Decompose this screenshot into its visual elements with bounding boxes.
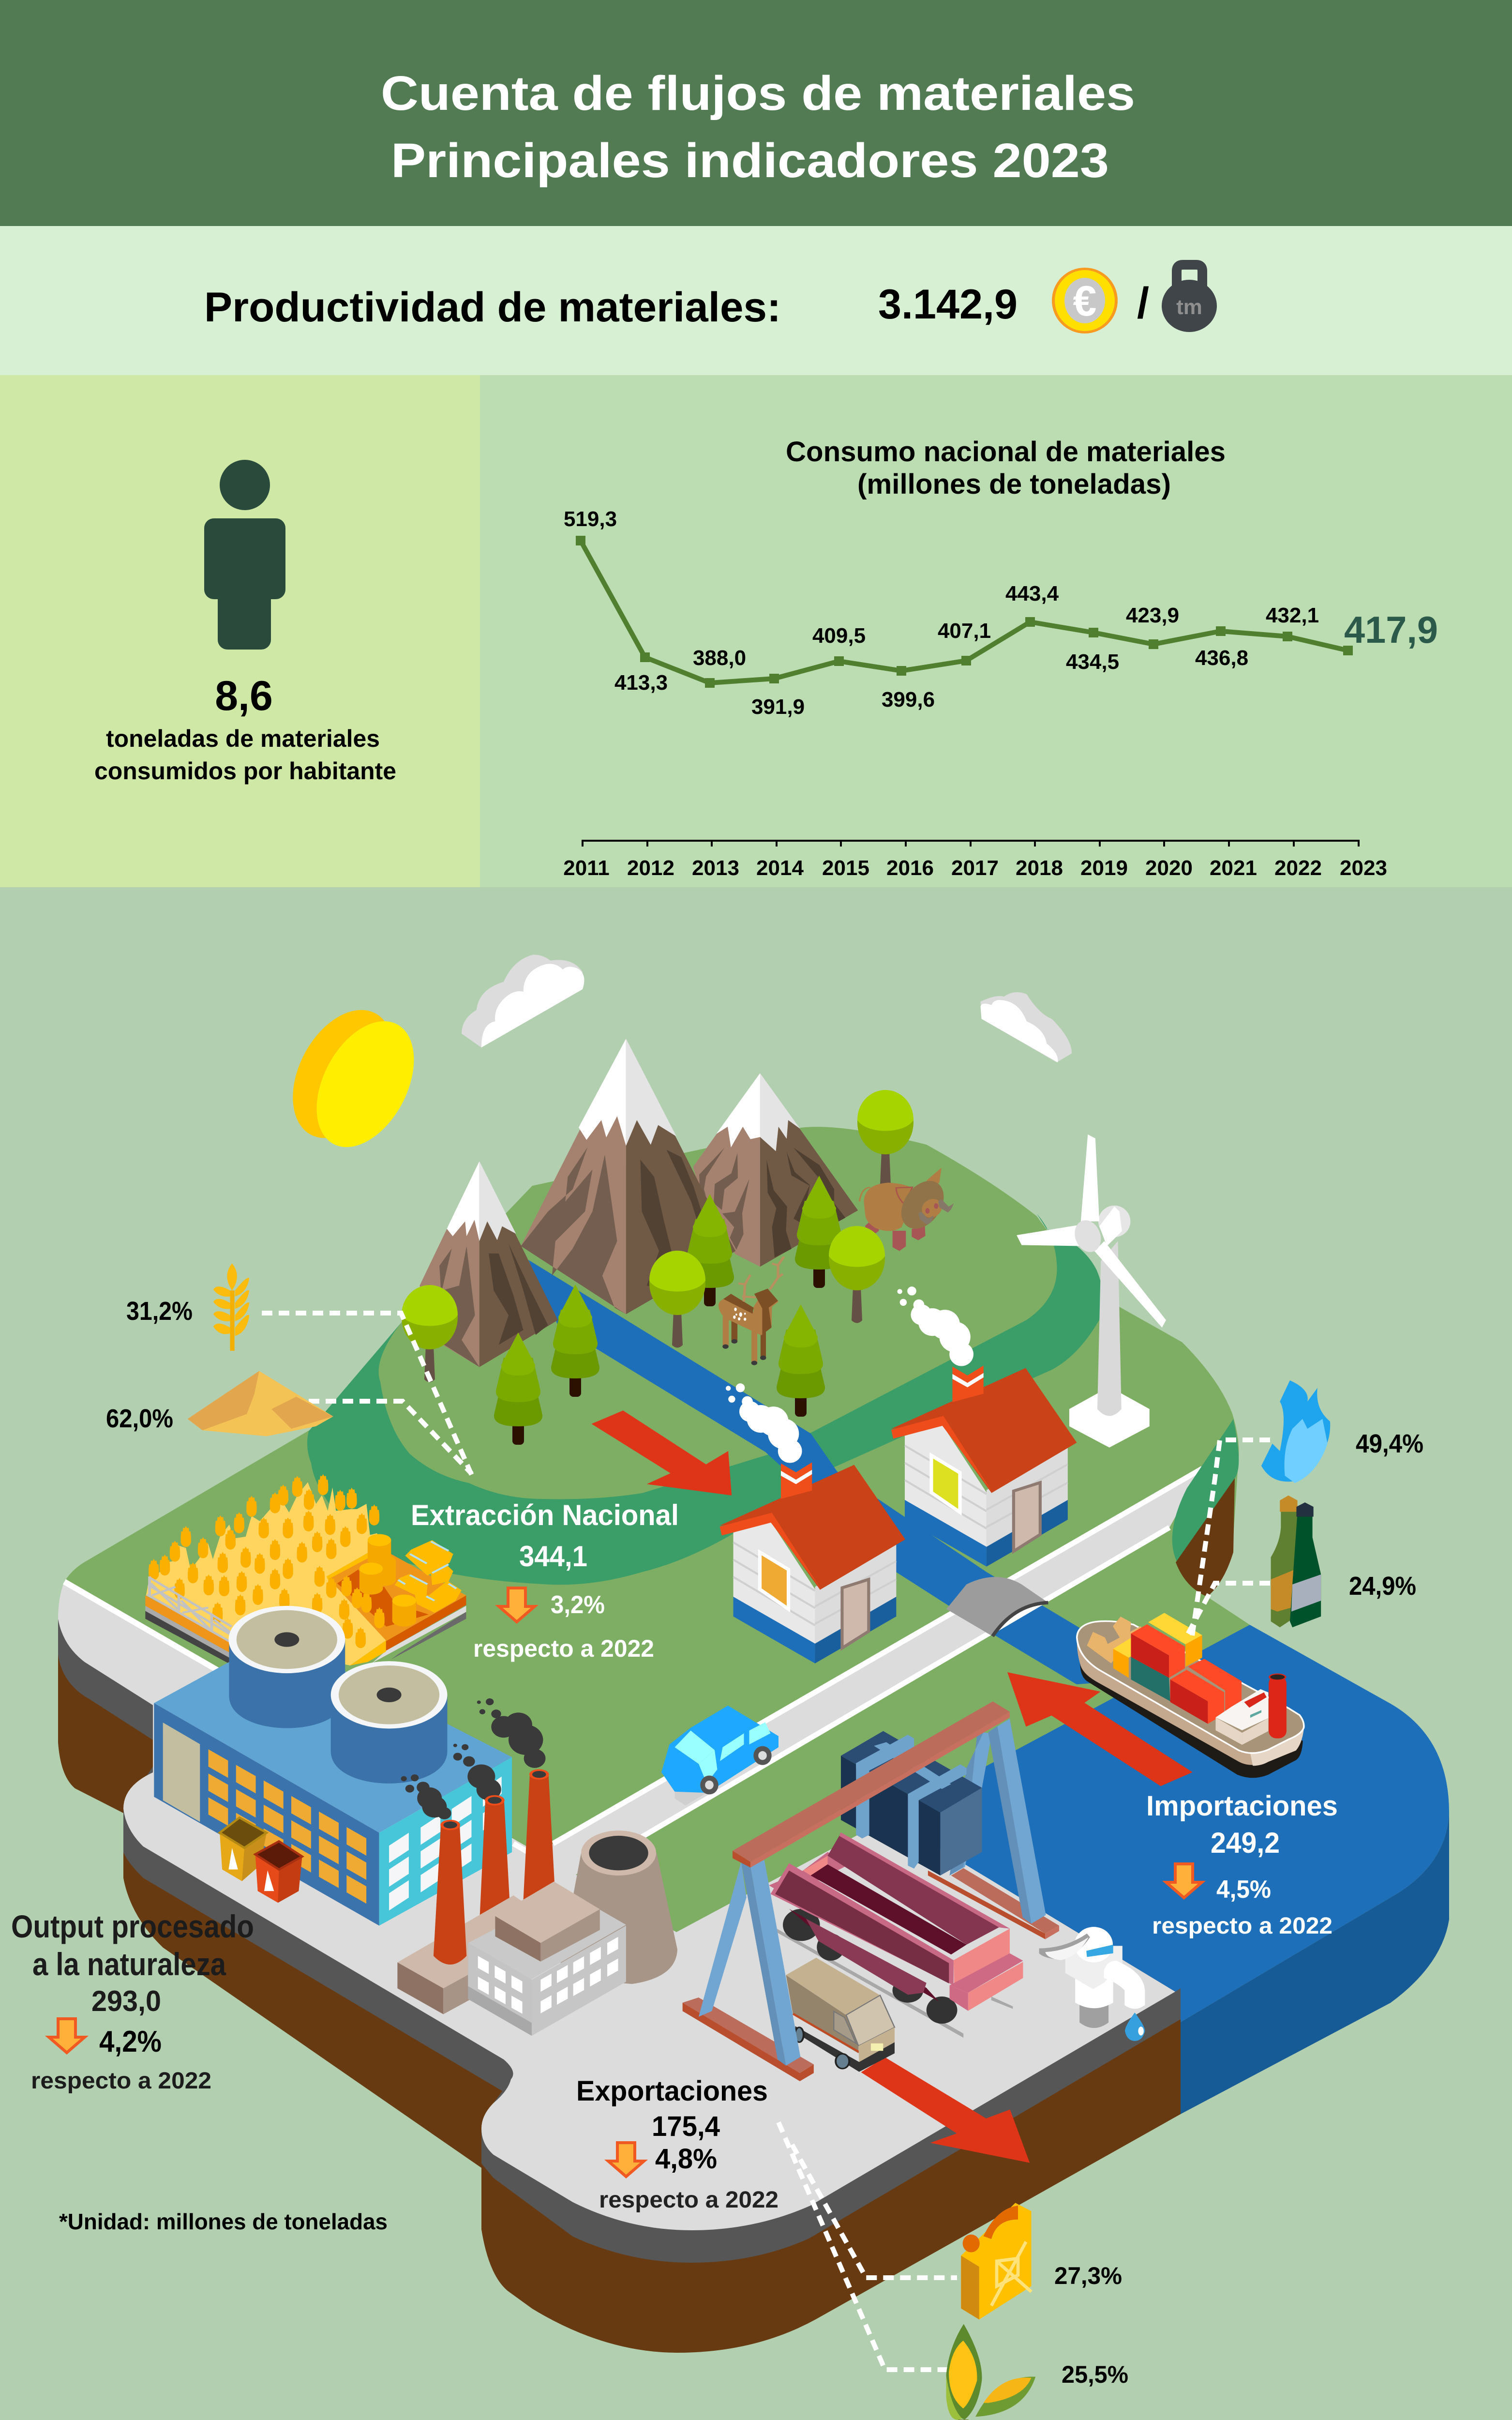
arrow: imports: [1007, 1672, 1193, 1786]
hay bales: [395, 1540, 462, 1613]
chart axis: 2020: [1145, 856, 1193, 880]
icon: down arrow: [499, 1588, 535, 1622]
crane back frame: [928, 1719, 1059, 1939]
island: dark paving side: [58, 1597, 1181, 2263]
callout: exports: Exportaciones: [576, 2075, 768, 2107]
line chart: 519,3: [564, 507, 617, 531]
ship cargo boxes: [1087, 1617, 1146, 1664]
coin stacks: [359, 1534, 416, 1627]
label: energy share: 49,4%: [1356, 1429, 1423, 1458]
title: Cuenta de flujos de materiales: [381, 66, 1135, 121]
line chart: 391,9: [751, 695, 805, 719]
label: fuel share: 27,3%: [1054, 2262, 1122, 2289]
bale ties: [398, 1542, 456, 1601]
callout: output to nature: Output procesado: [11, 1908, 254, 1944]
panel: line chart: [480, 375, 1512, 887]
icon: kettlebell: [1162, 265, 1217, 332]
grey building: [468, 1891, 626, 2036]
chart axis: 2014: [756, 856, 804, 880]
label: cereal share: 31,2%: [126, 1297, 193, 1326]
icon: sand pile: [188, 1371, 333, 1436]
label: minerals share: 62,0%: [106, 1404, 173, 1433]
field base: [145, 1554, 466, 1664]
chart axis: 2013: [692, 856, 739, 880]
chart axis: 2011: [563, 856, 610, 880]
bridge: [946, 1577, 1048, 1636]
chart title: (millones de toneladas): [857, 469, 1171, 500]
line chart: 443,4: [1005, 582, 1059, 605]
icon: cloud right: [980, 992, 1072, 1062]
factory windows white: [389, 1777, 502, 1910]
background: scene: [0, 887, 1512, 2420]
callout: national extraction: [411, 1499, 679, 1662]
river: [528, 1260, 1163, 1684]
icon: boar: [859, 1167, 954, 1251]
field: wheat: [145, 1474, 466, 1665]
line chart: 434,5: [1066, 650, 1119, 674]
callout: exports: 4,8%: [655, 2143, 717, 2175]
building roof block: [495, 1882, 600, 1962]
green band: [307, 1214, 1103, 1585]
containers on crane: [841, 1731, 982, 1876]
icon: sun: [272, 993, 434, 1164]
callout: national extraction: respecto a 2022: [473, 1635, 654, 1662]
callout: exports: respecto a 2022: [599, 2187, 778, 2213]
trees: [649, 1090, 913, 1347]
factory roof: [154, 1636, 512, 1833]
productivity value: 3.142,9: [878, 281, 1018, 328]
wind turbine: [1017, 1134, 1166, 1448]
road edge line: [64, 1582, 242, 1684]
icon: down arrow: [608, 2143, 644, 2177]
silo 1: [228, 1606, 345, 1728]
header band: [0, 0, 1512, 226]
ship: [1077, 1613, 1304, 1778]
chart axis: 2018: [1016, 856, 1063, 880]
sea top: [888, 1625, 1449, 2022]
chart axis: 2016: [886, 856, 934, 880]
chart axis: 2019: [1080, 856, 1128, 880]
line chart: 388,0: [693, 646, 746, 670]
callout: imports: Importaciones: [1146, 1790, 1338, 1822]
icon: corn: [946, 2324, 1035, 2420]
factory door: [163, 1723, 200, 1822]
leaf-shaped ground cut: [1172, 1419, 1239, 1597]
line chart: 432,1: [1266, 604, 1319, 627]
trees front: [402, 1226, 885, 1445]
ship cabin: [1215, 1674, 1287, 1745]
big mountain: [521, 1039, 735, 1314]
per capita caption: [94, 725, 396, 785]
line chart: 423,9: [1126, 604, 1179, 627]
chart axis: 2023: [1340, 856, 1387, 880]
arrow: exports: [861, 2057, 1030, 2163]
factory right wall: [379, 1757, 512, 1926]
wheat stalks: [146, 1482, 386, 1665]
icon: deer: [719, 1256, 784, 1365]
chart axis: 2015: [822, 856, 869, 880]
rail wagon: [769, 1832, 1023, 2038]
callout: exports: [576, 2075, 778, 2213]
chart title: [786, 436, 1226, 500]
icon: kettlebell: tm: [1176, 295, 1202, 319]
label: manufactured share: 24,9%: [1349, 1572, 1416, 1601]
icon: car: [661, 1706, 778, 1805]
callout: imports: respecto a 2022: [1152, 1913, 1332, 1939]
island: brown soil side: [58, 1597, 1181, 2353]
panel: per capita: [0, 375, 480, 887]
arrow: extraction: [591, 1410, 732, 1496]
title: Principales indicadores 2023: [391, 134, 1109, 188]
line chart: 407,1: [938, 619, 991, 643]
icon: bottles: [1271, 1496, 1321, 1627]
callout: national extraction: 344,1: [519, 1540, 587, 1573]
chart title: Consumo nacional de materiales: [786, 436, 1226, 468]
bin yellow: [220, 1817, 267, 1881]
title: [381, 66, 1135, 188]
line chart: 436,8: [1195, 646, 1248, 670]
green land: [64, 1127, 1250, 1932]
icon: person: [204, 460, 285, 650]
icon: down arrow: [1166, 1864, 1202, 1898]
sea side: [1181, 1813, 1449, 2114]
brown plinth: [397, 1895, 558, 2014]
chart axis: 2021: [1210, 856, 1257, 880]
chart axis: [563, 841, 1387, 880]
callout: output to nature: 4,2%: [99, 2025, 162, 2058]
dashed leader lines: [262, 1313, 1270, 2370]
silo 2: [331, 1661, 447, 1784]
callout: imports: 249,2: [1211, 1827, 1280, 1859]
wheat ears: [149, 1474, 385, 1648]
chimneys and smoke: [397, 1698, 626, 2036]
factory windows orange: [209, 1749, 366, 1904]
callout: output to nature: 293,0: [91, 1985, 161, 2017]
line chart: 413,3: [614, 671, 668, 695]
per capita caption: consumidos por habitante: [94, 757, 396, 785]
callout: output to nature: a la naturaleza: [32, 1946, 226, 1982]
small mountain: [419, 1161, 558, 1367]
icon: euro coin: [1052, 268, 1118, 333]
callout: exports: 175,4: [652, 2111, 720, 2142]
icon: flame: [1261, 1380, 1330, 1483]
unit note: *Unidad: millones de toneladas: [59, 2209, 388, 2234]
right mountain: [693, 1073, 858, 1267]
house 1 window: [760, 1552, 789, 1609]
callout: national extraction: 3,2%: [551, 1591, 605, 1619]
slash: /: [1137, 279, 1149, 328]
icon: wheat: [213, 1263, 249, 1351]
chart axis: 2017: [951, 856, 999, 880]
factory: [154, 1606, 512, 1926]
cooling tower: [558, 1830, 677, 1984]
per capita caption: toneladas de materiales: [106, 725, 380, 752]
ship containers: [1113, 1613, 1242, 1724]
callout: output to nature: respecto a 2022: [31, 2068, 211, 2094]
productivity heading: Productividad de materiales:: [204, 284, 781, 331]
road: [532, 1468, 1202, 1888]
callout: national extraction: Extracción Nacional: [411, 1499, 679, 1531]
factory left wall: [154, 1703, 379, 1926]
icon: euro coin: €: [1073, 277, 1096, 325]
line chart: 399,6: [882, 688, 935, 711]
fence: [147, 1576, 232, 1641]
callout: output to nature: [11, 1908, 254, 2094]
line chart: 417,9: [1344, 608, 1438, 651]
icon: jerry can: [961, 2203, 1032, 2319]
house 1: [720, 1383, 905, 1664]
per capita value: 8,6: [215, 673, 273, 719]
chart axis: 2022: [1274, 856, 1322, 880]
line chart: 409,5: [812, 624, 866, 648]
callout: imports: [1146, 1790, 1338, 1939]
callout: imports: 4,5%: [1216, 1876, 1271, 1904]
bin red: [255, 1841, 302, 1903]
house 2: [891, 1286, 1077, 1567]
icon: cloud left: [462, 954, 584, 1047]
island: grey paved surface: [58, 1582, 1175, 2230]
chart axis: 2012: [627, 856, 674, 880]
icon: water tap: [1039, 1927, 1145, 2041]
crane front frame: [683, 1701, 1010, 2081]
van: [786, 1958, 895, 2072]
label: crop share: 25,5%: [1062, 2361, 1128, 2388]
productivity band: [0, 226, 1512, 375]
icon: down arrow: [49, 2019, 85, 2053]
road stripes: [513, 1468, 1202, 1855]
line chart: [564, 507, 1438, 719]
house 2 window: [931, 1455, 960, 1512]
